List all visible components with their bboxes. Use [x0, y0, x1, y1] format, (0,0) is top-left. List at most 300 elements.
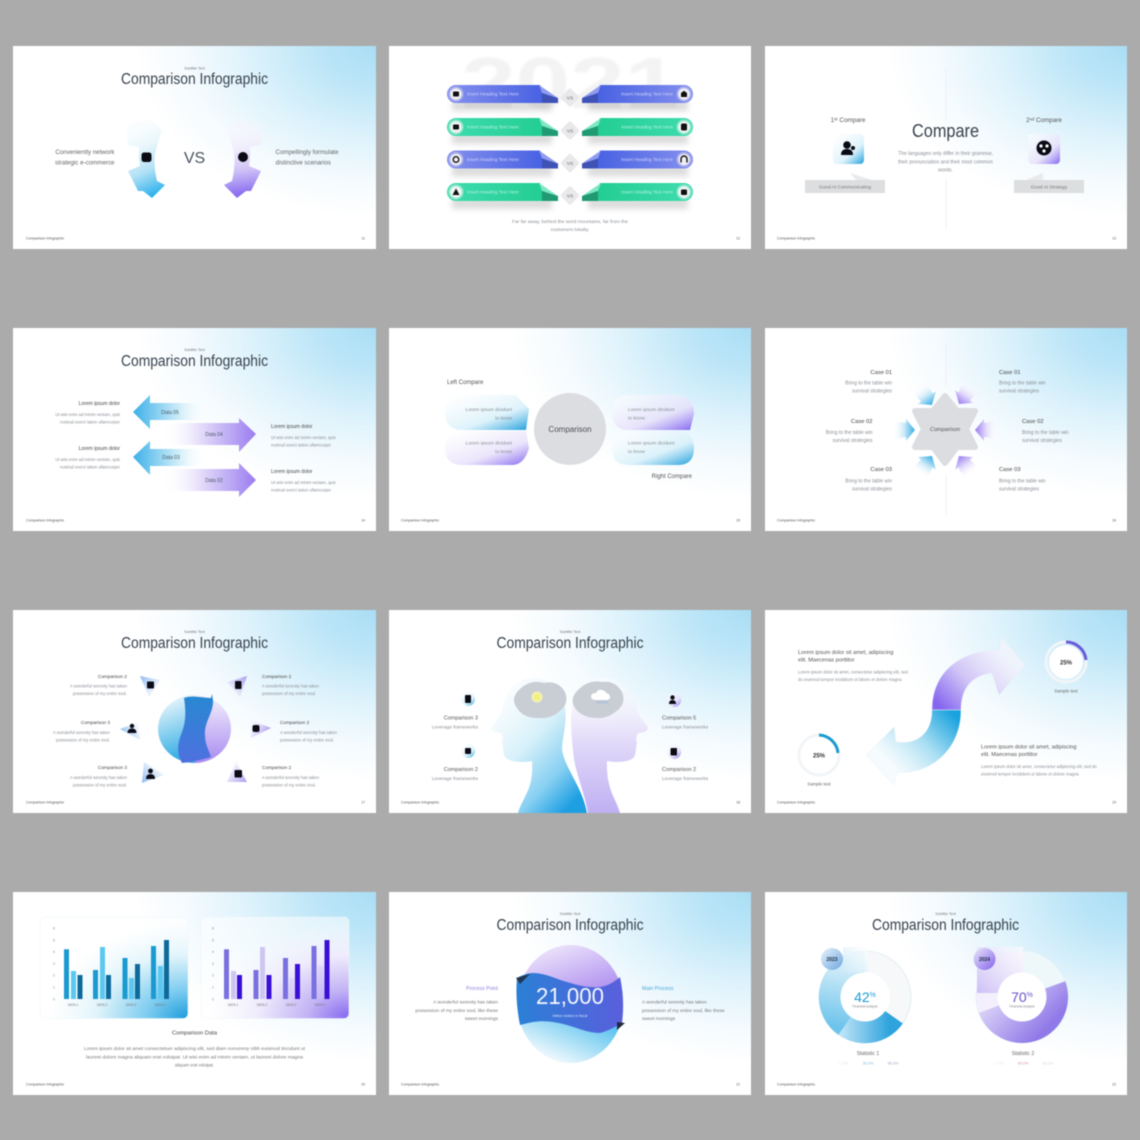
- chart panel purple: 5: [212, 938, 214, 942]
- icon bubble left 2: [461, 744, 475, 758]
- year badge 2023: 2023: [826, 957, 838, 963]
- white cloud: [591, 690, 610, 700]
- text block top left: do eiusmod tempor incididunt ut labore et dolore magna: [798, 677, 902, 682]
- text top left: [70, 674, 128, 696]
- star label: Comparison: [930, 427, 960, 433]
- right text 1: Ut wisi enim ad minim veniam, quis: [271, 435, 336, 440]
- chart panel blue: DATA 1: [68, 1003, 78, 1007]
- left pill bottom: [445, 431, 529, 465]
- icon: chat square: [142, 152, 152, 162]
- row 3 blue: Insert Heading Text Here: [467, 157, 519, 162]
- row 3 blue: VS: [567, 161, 573, 167]
- case right 1: Case 01: [999, 370, 1021, 376]
- band tail right: [617, 1022, 625, 1030]
- tag: strategy: [1014, 173, 1084, 193]
- right text 2: [662, 767, 709, 782]
- cloud shadow bar: [596, 701, 608, 704]
- chart panel purple: 2: [212, 974, 214, 978]
- footer: Comparison Infographic: [401, 800, 439, 804]
- slide background: [389, 328, 751, 531]
- icon bubble right 2: [667, 745, 681, 759]
- case left 2: [826, 419, 873, 444]
- left text 1: [432, 716, 479, 730]
- left paragraph: sweet mornings: [465, 1016, 499, 1022]
- page number: 13: [1112, 236, 1116, 240]
- donut 2: %: [1027, 992, 1033, 999]
- right text 1: nostrud exerci tation ullamcorper: [271, 442, 332, 447]
- chart panel purple: 1: [212, 986, 214, 990]
- left pill text: Lorem ipsum dicidunt: [466, 407, 513, 413]
- VS label: VS: [184, 150, 205, 167]
- text left: [53, 720, 111, 742]
- description: The languages only differ in their grammar,: [898, 151, 993, 157]
- slide background: [765, 610, 1127, 813]
- caption: Far far away, behind the word mountains, far from the: [512, 219, 628, 225]
- label: 2nd compare: 2ⁿᵈ Compare: [1026, 117, 1062, 124]
- arrow labels: [161, 410, 223, 484]
- gauge top right: 25%: [1060, 660, 1073, 666]
- case left 1: Bring to the table win: [845, 380, 892, 386]
- right text 2: Lorem ipsum dolor: [271, 469, 313, 475]
- case left 2: Case 02: [851, 419, 872, 425]
- text bottom left: Comparison 3: [98, 765, 127, 770]
- left pill top: [445, 395, 529, 430]
- left head: [491, 678, 587, 813]
- right text 2: Comparison 2: [662, 767, 696, 773]
- text right: possession of my entire soul.: [280, 738, 334, 742]
- statistic 2: Statistic 2: [1012, 1051, 1034, 1057]
- chart description: aliquam erat volutpat.: [175, 1063, 214, 1068]
- title: Comparison Infographic: [872, 917, 1019, 934]
- icon: chat round: [238, 152, 248, 162]
- case left 1: survival strategies: [852, 388, 892, 394]
- chart panel blue: 5: [53, 938, 55, 942]
- right pill text 2: Lorem ipsum dicidunt: [628, 440, 675, 446]
- icon tile: globe: [1028, 134, 1060, 164]
- slide background: [389, 610, 751, 813]
- case left 1: [845, 370, 892, 394]
- arrow: data 03: [133, 441, 205, 475]
- case right 1: survival strategies: [999, 388, 1040, 394]
- slide background: [765, 328, 1127, 531]
- chart panel purple: DATA 2: [257, 1003, 267, 1007]
- donut 1: Financial analysis: [852, 1004, 878, 1008]
- chart panel purple: DATA 1: [228, 1003, 238, 1007]
- text right: Comparison 2: [280, 720, 310, 725]
- page number: 21: [736, 1082, 740, 1086]
- left text: Conveniently network: [55, 149, 115, 156]
- chart description: Lorem ipsum dolor sit amet consectetuer adipiscing elit, sed diam nonummy nibh euismod tincidunt ut: [84, 1046, 306, 1051]
- page number: 22: [1112, 1082, 1116, 1086]
- text top left: possession of my entire soul.: [73, 691, 127, 696]
- panel: slide 10 bar charts: [13, 892, 376, 1095]
- page number: 12: [736, 236, 740, 240]
- chart panel blue: DATA 2: [97, 1003, 107, 1007]
- globe with purple top and cyan bottom: [520, 944, 619, 1064]
- arrow: data 05: [133, 395, 207, 429]
- text top right: Comparison 2: [262, 674, 292, 679]
- page number: 15: [736, 518, 740, 522]
- statistic 1: 7.73%: [838, 1062, 849, 1066]
- row 3 blue: [447, 150, 693, 176]
- statistic 1: 56.3%: [888, 1062, 899, 1066]
- row 4 green: Insert Heading Text Here: [467, 190, 519, 194]
- gauge top right: [1046, 642, 1086, 682]
- case right 2: survival strategies: [1022, 438, 1063, 444]
- gauge bottom left: 25%: [813, 754, 826, 760]
- arrow: middle left: [893, 419, 915, 441]
- left text 2: Leverage frameworks: [432, 776, 479, 782]
- left text 2: Lorem ipsum dolor: [79, 446, 120, 452]
- triangle icon right: [251, 720, 271, 738]
- left text 1: Lorem ipsum dolor: [79, 401, 120, 407]
- panel: slide 8 heads: [389, 610, 751, 813]
- triangle icon bottom right: [227, 762, 247, 782]
- triangle icon top right: [227, 676, 247, 697]
- text top right: A wonderful serenity has taken: [262, 684, 320, 688]
- slide background: [765, 46, 1127, 249]
- arrow labels: Data 02: [205, 478, 223, 484]
- right head: [571, 678, 648, 813]
- chart panel blue: [40, 917, 188, 1018]
- left text 1: Comparison 3: [444, 716, 478, 722]
- center divider: [945, 70, 947, 228]
- arrow: bottom right: [950, 450, 981, 480]
- chart panel purple: [201, 917, 349, 1018]
- description: words.: [938, 168, 953, 174]
- right pill text: to know: [628, 416, 645, 422]
- tag: communicating: [805, 173, 885, 193]
- left heading: Process Point: [466, 986, 499, 992]
- text bottom right: possession of my entire soul.: [262, 782, 316, 788]
- right compare label: Right Compare: [652, 474, 693, 480]
- donut 1: [819, 947, 911, 1043]
- case right 3: survival strategies: [999, 486, 1040, 492]
- left text: strategic e-commerce: [55, 160, 115, 166]
- case left 2: survival strategies: [832, 438, 873, 444]
- right paragraph: A wonderful serenity has taken: [642, 1000, 707, 1006]
- arrow: data 04: [164, 418, 256, 452]
- right gear: [224, 119, 262, 198]
- row 1 blue: VS: [567, 95, 573, 101]
- chart panel purple: DATA 3: [286, 1003, 296, 1007]
- case left 3: Bring to the table win: [845, 478, 892, 484]
- statistic 2: 56.3%: [1043, 1062, 1054, 1066]
- panel: slide 9 curved arrows: [765, 610, 1127, 813]
- subtitle: Subtitle Text: [184, 348, 206, 352]
- footer: Comparison Infographic: [401, 518, 439, 522]
- subtitle: Subtitle Text: [184, 630, 206, 634]
- donut 2: [976, 947, 1068, 1043]
- row 2 green: VS: [567, 128, 573, 134]
- left compare label: Left Compare: [447, 380, 484, 386]
- right pill text 2: to know: [628, 449, 645, 455]
- footer: Comparison Infographic: [777, 236, 815, 240]
- statistic 1: [838, 1051, 899, 1066]
- page number: 18: [736, 800, 740, 804]
- center circle: [534, 393, 606, 465]
- chart panel purple: 6: [212, 926, 214, 930]
- row 1 blue: [447, 85, 693, 111]
- arrow labels: Data 05: [161, 410, 179, 416]
- slide background: [13, 610, 376, 813]
- right text 1: Lorem ipsum dolor: [271, 424, 313, 430]
- label: 1st compare: 1ˢᵗ Compare: [831, 117, 866, 124]
- left text 2: [432, 767, 479, 782]
- footer: Comparison Infographic: [26, 518, 64, 522]
- chart panel purple: 4: [212, 950, 214, 954]
- chart panel purple: DATA 4: [315, 1003, 325, 1007]
- left pill text 2: Lorem ipsum dicidunt: [466, 440, 513, 446]
- chart panel purple: 3: [212, 962, 214, 966]
- chart panel blue: 0: [53, 997, 55, 1001]
- statistic 2: 7.73%: [994, 1062, 1005, 1066]
- row 2 green: Insert Heading Text Here: [467, 124, 519, 130]
- panel: slide 6 star: [765, 328, 1127, 531]
- sun: [532, 692, 542, 702]
- right paragraph: sweet mornings: [642, 1016, 676, 1022]
- subtitle: Subtitle Text: [560, 630, 581, 634]
- donut 1: 42: [854, 989, 870, 1005]
- left brain cloud: [514, 682, 566, 718]
- left gear: [127, 119, 165, 198]
- central circle: [158, 694, 231, 763]
- tag: communicating: Good At Communicating: [819, 184, 871, 190]
- page number: 20: [361, 1082, 365, 1086]
- left text 1: Leverage frameworks: [432, 724, 479, 730]
- right text 1: [662, 716, 709, 730]
- case right 1: Bring to the table win: [999, 380, 1046, 386]
- case right 2: Case 02: [1022, 419, 1044, 425]
- right paragraph: possession of my entire soul, like these: [642, 1008, 725, 1014]
- right text 2: [271, 469, 336, 492]
- text block top left: [798, 650, 909, 682]
- chart panel purple: 0: [212, 997, 214, 1001]
- right text 2: Leverage frameworks: [662, 776, 709, 782]
- footer: Comparison Infographic: [777, 518, 815, 522]
- right pill top: [612, 395, 694, 430]
- case left 3: Case 03: [870, 467, 892, 473]
- big number: 21,000: [536, 983, 604, 1009]
- right text 2: nostrud exerci tation ullamcorper: [271, 487, 332, 492]
- case left 1: Case 01: [870, 370, 892, 376]
- arrow up purple: [932, 637, 1025, 710]
- text block bottom right: elit. Maecenas porttitor: [981, 752, 1038, 758]
- panel: slide 11 big number: [389, 892, 751, 1095]
- gauge bottom left: [799, 735, 839, 775]
- center label: Comparison: [548, 425, 592, 434]
- chart panel blue: 1: [53, 986, 55, 990]
- right text: Compellingly formulate: [276, 149, 339, 156]
- left text 2: nostrud exerci tation ullamcorper: [60, 464, 121, 469]
- case right 1: [999, 370, 1046, 394]
- chart panel blue: DATA 3: [126, 1003, 136, 1007]
- arrow: top right: [950, 380, 981, 410]
- icon bubble left 1: [461, 692, 475, 706]
- page number: 14: [361, 518, 365, 522]
- statistic 2: [994, 1051, 1054, 1066]
- chart panel blue: 2: [53, 974, 55, 978]
- wave band: [516, 973, 623, 1033]
- slide background: [389, 46, 751, 249]
- footer: Comparison Infographic: [26, 236, 64, 240]
- right text: distinctive scenarios: [276, 160, 331, 166]
- footer: Comparison Infographic: [26, 1082, 64, 1086]
- case right 3: Bring to the table win: [999, 478, 1046, 484]
- band tail left: [516, 974, 530, 984]
- right pill text: Lorem ipsum dicidunt: [628, 407, 675, 413]
- text left: possession of my entire soul.: [56, 738, 110, 742]
- triangle icon top left: [140, 676, 160, 697]
- text bottom left: A wonderful serenity has taken: [70, 775, 128, 780]
- panel: slide 5 compare pills: [389, 328, 751, 531]
- icon tile: person: [833, 134, 864, 164]
- text right: [280, 720, 338, 742]
- triangle icon bottom left: [142, 762, 164, 783]
- title: Comparison Infographic: [121, 635, 268, 652]
- arrow: data 02: [164, 463, 256, 497]
- page number: 11: [361, 236, 365, 240]
- footer: Comparison Infographic: [777, 800, 815, 804]
- title: Comparison Infographic: [121, 71, 268, 88]
- right text 1: [271, 424, 336, 447]
- panel: slide 1 VS: [13, 46, 376, 249]
- page number: 19: [1112, 800, 1116, 804]
- year badge 2024: [974, 948, 996, 970]
- text block bottom right: Lorem ipsum dolor sit amet, consectetur adipiscing elit, sed do: [981, 764, 1097, 769]
- text top right: [262, 674, 320, 696]
- left text 1: nostrud exerci tation ullamcorper: [60, 419, 121, 424]
- text block bottom right: Lorem ipsum dolor sit amet, adipiscing: [981, 744, 1076, 750]
- row 1 blue: Insert Heading Text Here: [467, 92, 519, 96]
- arrow labels: Data 04: [205, 432, 223, 438]
- text block bottom right: [981, 744, 1097, 776]
- donut 2: Financial analysis: [1009, 1004, 1035, 1008]
- page number: 17: [361, 800, 365, 804]
- heading: Compare: Compare: [912, 121, 979, 141]
- chart panel blue: DATA 4: [155, 1003, 165, 1007]
- text bottom left: possession of my entire soul.: [73, 782, 127, 788]
- arrow: top left: [910, 381, 941, 411]
- row 3 blue: Insert Heading Text Here: [621, 157, 673, 162]
- text top left: A wonderful serenity has taken: [70, 684, 128, 688]
- arrow labels: Data 03: [162, 455, 180, 461]
- text bottom left: [70, 765, 128, 788]
- panel: slide 7 circle: [13, 610, 376, 813]
- text left: Comparison 3: [81, 720, 110, 725]
- title: Comparison Infographic: [496, 635, 644, 652]
- year badge 2024: 2024: [979, 957, 990, 963]
- statistic 1: 30.2%: [863, 1062, 874, 1066]
- slide background: [13, 328, 376, 531]
- chart heading: Comparison Data: [172, 1030, 218, 1036]
- subtitle: Subtitle Text: [560, 912, 581, 916]
- text top left: Comparison 2: [98, 674, 127, 679]
- slide background: [13, 892, 376, 1095]
- number caption: Million dollars in fiscal: [553, 1014, 588, 1018]
- row 1 blue: Insert Heading Text Here: [621, 92, 673, 96]
- case left 2: Bring to the table win: [826, 430, 873, 436]
- star shape: [915, 396, 975, 463]
- slide background: [13, 46, 376, 249]
- center divider: [945, 345, 947, 515]
- row 4 green: [447, 183, 693, 209]
- left pill text: to know: [495, 416, 512, 422]
- statistic 1: Statistic 1: [857, 1051, 879, 1057]
- panel: slide 12 donuts: [765, 892, 1127, 1095]
- subtitle: Subtitle Text: [184, 66, 206, 70]
- title: Comparison Infographic: [121, 353, 268, 370]
- left pill text 2: to know: [495, 449, 512, 455]
- row 4 green: Insert Heading Text Here: [621, 190, 673, 194]
- title: Comparison Infographic: [496, 917, 644, 934]
- case right 3: Case 03: [999, 467, 1021, 473]
- footer: Comparison Infographic: [777, 1082, 815, 1086]
- text bottom right: A wonderful serenity has taken: [262, 775, 320, 780]
- donut 2: 70: [1011, 989, 1027, 1005]
- footer: Comparison Infographic: [401, 1082, 439, 1086]
- subtitle: Subtitle Text: [935, 912, 957, 916]
- slide background: [765, 892, 1127, 1095]
- row 2 green: Insert Heading Text Here: [621, 124, 673, 130]
- icon bubble right 1: [667, 693, 681, 707]
- right brain cloud: [573, 681, 623, 718]
- left text 2: Ut wisi enim ad minim veniam, quis: [55, 457, 120, 462]
- text block top left: Lorem ipsum dolor sit amet, consectetur adipiscing elit, sed: [798, 670, 909, 674]
- text right: A wonderful serenity has taken: [280, 730, 338, 735]
- text top right: possession of my entire soul.: [262, 691, 316, 696]
- row 2 green: [447, 118, 693, 144]
- right text 2: Ut wisi enim ad minim veniam, quis: [271, 480, 336, 485]
- left text 1: Ut wisi enim ad minim veniam, quis: [55, 412, 120, 417]
- text bottom right: Comparison 2: [262, 765, 292, 770]
- chart panel blue: 3: [53, 962, 55, 966]
- year badge 2023: [821, 948, 843, 970]
- footer: Comparison Infographic: [26, 800, 64, 804]
- gauge label: Sample text: [807, 782, 831, 786]
- gauge label: Sample text: [1054, 688, 1078, 694]
- donut 1: %: [870, 992, 876, 999]
- chart panel blue: 4: [53, 950, 55, 954]
- left text 2: [55, 446, 121, 469]
- case left 3: [845, 467, 892, 492]
- case right 2: Bring to the table win: [1022, 430, 1069, 436]
- left paragraph: A wonderful serenity has taken: [433, 1000, 498, 1006]
- text bottom right: [262, 765, 320, 788]
- tag: strategy: Good At Strategy: [1031, 184, 1068, 190]
- page number: 16: [1112, 518, 1116, 522]
- ghost year text: 2021: [461, 44, 679, 124]
- panel: slide 2 VS banners: [389, 44, 751, 249]
- left paragraph: possession of my entire soul, like these: [415, 1008, 498, 1014]
- right text 1: Comparison 5: [662, 716, 696, 722]
- chart description: laoreet dolore magna aliquam erat volutpat. Ut wisi enim ad minim veniam, ut laoreet dolore magna: [86, 1054, 304, 1059]
- text block bottom right: eiusmod tempor incididunt ut labore et dolore magna: [981, 771, 1079, 776]
- case right 2: [1022, 419, 1069, 444]
- text left: A wonderful serenity has taken: [53, 730, 111, 735]
- right text 1: Leverage frameworks: [662, 724, 709, 730]
- right pill bottom: [612, 431, 694, 465]
- triangle icon left: [120, 722, 140, 740]
- panel: slide 4 arrows: [13, 328, 376, 531]
- left text 2: Comparison 2: [444, 767, 478, 773]
- text block top left: elit. Maecenas porttitor: [798, 657, 855, 663]
- arrow: bottom left: [910, 450, 941, 480]
- arrow down blue: [866, 710, 961, 785]
- slide background: [389, 892, 751, 1095]
- case right 3: [999, 467, 1046, 492]
- panel: slide 3 Compare: [765, 46, 1127, 249]
